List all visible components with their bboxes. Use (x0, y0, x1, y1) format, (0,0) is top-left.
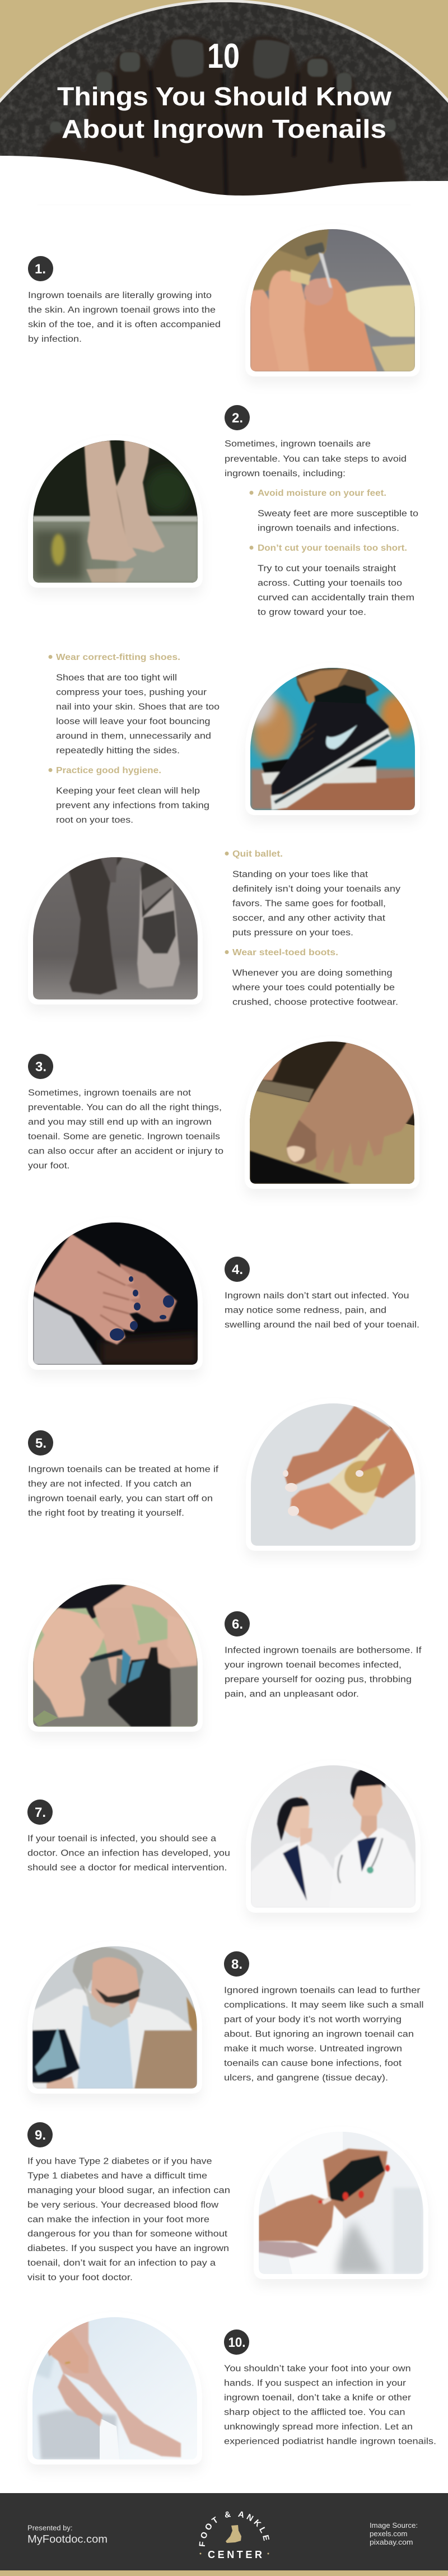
logo: Foot & Ankle Center: CENTER (208, 2549, 262, 2560)
bullet: steel-toed boots: crushed, choose protective footwear. (232, 997, 398, 1007)
badge 1 (28, 256, 53, 281)
text 8: about. But ignoring an ingrown toenail can (224, 2029, 414, 2039)
text 10: ingrown toenail, don’t take a knife or other (224, 2393, 411, 2402)
text 3: can also occur after an accident or injury to (28, 1146, 223, 1156)
photo: toenail procedure (245, 224, 420, 376)
text 6: pain, and an unpleasant odor. (225, 1690, 359, 1699)
text 9: be very serious. Your decreased blood flow (27, 2201, 219, 2210)
title (57, 37, 391, 143)
bullet: quit ballet: soccer, and any other activity that (232, 913, 386, 923)
logo: Foot & Ankle Center (199, 2511, 270, 2560)
photo: doctor with x-ray (27, 1941, 202, 2094)
text 3: and you may still end up with an ingrown (28, 1117, 212, 1127)
panel: item 3 (28, 1036, 419, 1189)
text 3: preventable. You can do all the right things, (28, 1103, 222, 1113)
badge 5 (28, 1430, 53, 1456)
bullet: good hygiene: prevent any infections from taking (56, 801, 209, 810)
bullet: quit ballet: Standing on your toes like that (232, 869, 368, 880)
bullet: don't cut too short: Try to cut your toenails straight (258, 564, 396, 574)
bullet: avoid moisture: ingrown toenails and infections. (258, 523, 399, 533)
text 10: sharp object to the afflicted toe. You can (224, 2408, 405, 2417)
bullet: avoid moisture: Avoid moisture on your feet. (258, 489, 386, 498)
text 10: You shouldn’t take your foot into your own (224, 2364, 411, 2373)
text 4: may notice some redness, pain, and (225, 1305, 386, 1315)
badge 2 (225, 405, 250, 430)
text 9: dangerous for you than for someone without (27, 2229, 228, 2239)
photo: foot on wood (245, 1036, 419, 1189)
text 10 (224, 2364, 436, 2446)
text 8: make it much worse. Untreated ingrown (224, 2044, 402, 2054)
badge 8 (224, 1951, 249, 1977)
text 9: If you have Type 2 diabetes or if you have (27, 2157, 212, 2166)
badge 3: 3. (35, 1059, 46, 1075)
text 9: can make the infection in your foot more (27, 2215, 209, 2224)
panel: item 5 (28, 1398, 421, 1551)
bullet: steel-toed boots: where your toes could potentially be (232, 983, 395, 993)
bullet: don't cut too short: Don’t cut your toenails too short. (258, 543, 407, 553)
badge 7 (27, 1800, 53, 1825)
bullet: quit ballet (225, 849, 400, 938)
text 5 (28, 1464, 219, 1518)
text 9: visit to your foot doctor. (27, 2273, 133, 2282)
presented by: MyFootdoc.com (27, 2533, 108, 2546)
panel: item 8 (27, 1941, 423, 2094)
badge 10 (224, 2329, 249, 2355)
badge 5: 5. (35, 1436, 46, 1451)
badge 2: 2. (232, 411, 243, 426)
text 9: toenail, don’t wait for an infection to pay a (27, 2258, 216, 2268)
photo: two doctors (246, 1760, 421, 1913)
bullet: quit ballet: definitely isn’t doing your toenails any (232, 884, 400, 894)
title: About Ingrown Toenails (62, 114, 386, 143)
badge 6: 6. (232, 1617, 243, 1632)
photo: climbing shoe (28, 1579, 203, 1732)
text 7: If your toenail is infected, you should see a (27, 1834, 216, 1843)
text 9: Type 1 diabetes and have a difficult time (27, 2172, 207, 2180)
badge 6 (225, 1611, 250, 1636)
text 6 (225, 1646, 422, 1699)
photo: blood sugar test (254, 2127, 428, 2279)
text 1: skin of the toe, and it is often accompanied (28, 320, 221, 329)
badge 7: 7. (35, 1805, 46, 1820)
bullet: quit ballet: Quit ballet. (232, 849, 283, 859)
header photo: toes on carpet (0, 0, 448, 202)
bullet: good hygiene: root on your toes. (56, 816, 133, 825)
text 2 (225, 439, 407, 478)
bullet: steel-toed boots: Whenever you are doing something (232, 968, 392, 978)
text 5: they are not infected. If you catch an (28, 1479, 192, 1489)
bullet: correct-fitting shoes: compress your toes, pushing your (56, 688, 207, 697)
bullet: correct-fitting shoes: nail into your skin. Shoes that are too (56, 703, 220, 712)
text 7 (27, 1834, 230, 1872)
photo: leg and foot (27, 2312, 202, 2465)
text 2: ingrown toenails, including: (225, 469, 346, 478)
bullet: don't cut too short: to grow toward your toe. (258, 607, 366, 617)
text 3: Sometimes, ingrown toenails are not (28, 1088, 192, 1098)
panel: shoes and hygiene (48, 653, 420, 825)
panel: item 4 (28, 1217, 419, 1370)
bullet: correct-fitting shoes: Wear correct-fitting shoes. (56, 653, 180, 662)
header banner (0, 0, 448, 196)
photo: navy toenails (28, 1217, 203, 1370)
text 2: Sometimes, ingrown toenails are (225, 439, 371, 449)
bullet: steel-toed boots (225, 948, 398, 1007)
badge 4: 4. (232, 1262, 243, 1277)
text 7: should see a doctor for medical intervention. (27, 1863, 227, 1872)
title: Things You Should Know (57, 82, 391, 111)
text 3: your foot. (28, 1161, 69, 1171)
photo: feet in water (28, 435, 203, 588)
text 5: the right foot by treating it yourself. (28, 1508, 184, 1518)
bullet: steel-toed boots: Wear steel-toed boots. (232, 948, 338, 957)
text 8: part of your body it’s not worth worrying (224, 2015, 402, 2025)
panel: item 9 (27, 2122, 428, 2282)
text 6: prepare yourself for oozing pus, throbbing (225, 1675, 412, 1684)
footer (0, 2493, 448, 2576)
text 8: toenails can cause bone infections, foot (224, 2058, 402, 2068)
badge 3 (28, 1054, 53, 1079)
text 3: toenail. Some are genetic. Ingrown toenails (28, 1132, 220, 1142)
bullet: correct-fitting shoes: around in them, unnecessarily and (56, 732, 211, 741)
badge 9: 9. (35, 2128, 46, 2143)
photo: sneaker (242, 663, 420, 815)
bullet: quit ballet: puts pressure on your toes. (232, 928, 353, 938)
bullet: don't cut too short: curved can accidentally train them (258, 593, 414, 603)
bullet: quit ballet: favors. The same goes for football, (232, 899, 386, 909)
text 3 (28, 1088, 223, 1171)
text 9: diabetes. If you suspect you have an ingrown (27, 2244, 229, 2253)
image source (370, 2521, 418, 2546)
photo: ballet (28, 852, 203, 1005)
text 10: hands. If you suspect an infection in your (224, 2379, 406, 2388)
text 1: the skin. An ingrown toenail grows into the (28, 305, 216, 315)
image source: pixabay.com (370, 2538, 413, 2546)
text 7: doctor. Once an infection has developed, you (27, 1849, 230, 1858)
text 1 (28, 291, 221, 344)
bullet: correct-fitting shoes: Shoes that are too tight will (56, 673, 177, 682)
text 8: complications. It may seem like such a small (224, 2000, 423, 2010)
presented by: Presented by: (27, 2523, 73, 2532)
badge 1: 1. (35, 262, 46, 277)
photo: foot scrub (246, 1398, 421, 1551)
bullet: avoid moisture: Sweaty feet are more susceptible to (258, 509, 418, 519)
badge 8: 8. (231, 1957, 242, 1972)
bullet: don't cut too short: across. Cutting your toenails too (258, 578, 402, 588)
text 1: Ingrown toenails are literally growing into (28, 291, 212, 300)
text 10: unknowingly spread more infection. Let an (224, 2422, 413, 2431)
text 6: your ingrown toenail becomes infected, (225, 1661, 402, 1670)
text 10: experienced podiatrist handle ingrown toenails. (224, 2437, 436, 2446)
header wave (0, 156, 448, 204)
panel: item 2 (28, 405, 418, 617)
panel: item 6 (28, 1579, 422, 1732)
badge 10: 10. (228, 2335, 245, 2350)
presented by (27, 2523, 108, 2546)
text 6: Infected ingrown toenails are bothersome. If (225, 1646, 422, 1655)
text 4 (225, 1291, 419, 1330)
title: 10 (207, 37, 240, 76)
bullet: correct-fitting shoes: loose will leave your foot bouncing (56, 717, 211, 726)
bullet: don't cut too short (250, 543, 414, 617)
panel: item 7 (27, 1760, 421, 1913)
panel: item 10 (27, 2312, 436, 2465)
bullet: good hygiene (48, 766, 209, 825)
text 4: swelling around the nail bed of your toenail. (225, 1320, 419, 1330)
bullet: correct-fitting shoes: repeatedly hitting the sides. (56, 746, 180, 755)
text 8: ulcers, and gangrene (tissue decay). (224, 2073, 388, 2083)
badge 9 (27, 2122, 53, 2147)
logo: Foot & Ankle Center: FOOT & ANKLE (199, 2511, 270, 2547)
bullet: avoid moisture (250, 489, 418, 533)
text 2: preventable. You can take steps to avoid (225, 454, 407, 464)
bullet: good hygiene: Practice good hygiene. (56, 766, 161, 775)
text 8: Ignored ingrown toenails can lead to further (224, 1986, 420, 1996)
text 8 (224, 1986, 423, 2083)
text 4: Ingrown nails don’t start out infected. You (225, 1291, 409, 1301)
text 5: ingrown toenail early, you can start off on (28, 1494, 213, 1504)
bullet: good hygiene: Keeping your feet clean will help (56, 787, 200, 796)
panel: item 1 (28, 224, 420, 376)
text 5: Ingrown toenails can be treated at home if (28, 1464, 219, 1475)
image source: Image Source: (370, 2521, 418, 2529)
panel: ballet and boots (28, 849, 400, 1007)
bullet: correct-fitting shoes (48, 653, 220, 755)
text 1: by infection. (28, 334, 82, 344)
text 9: managing your blood sugar, an infection can (27, 2186, 230, 2195)
badge 4 (225, 1257, 250, 1282)
icon: foot (226, 2525, 241, 2543)
text 9 (27, 2157, 230, 2282)
image source: pexels.com (370, 2529, 408, 2538)
